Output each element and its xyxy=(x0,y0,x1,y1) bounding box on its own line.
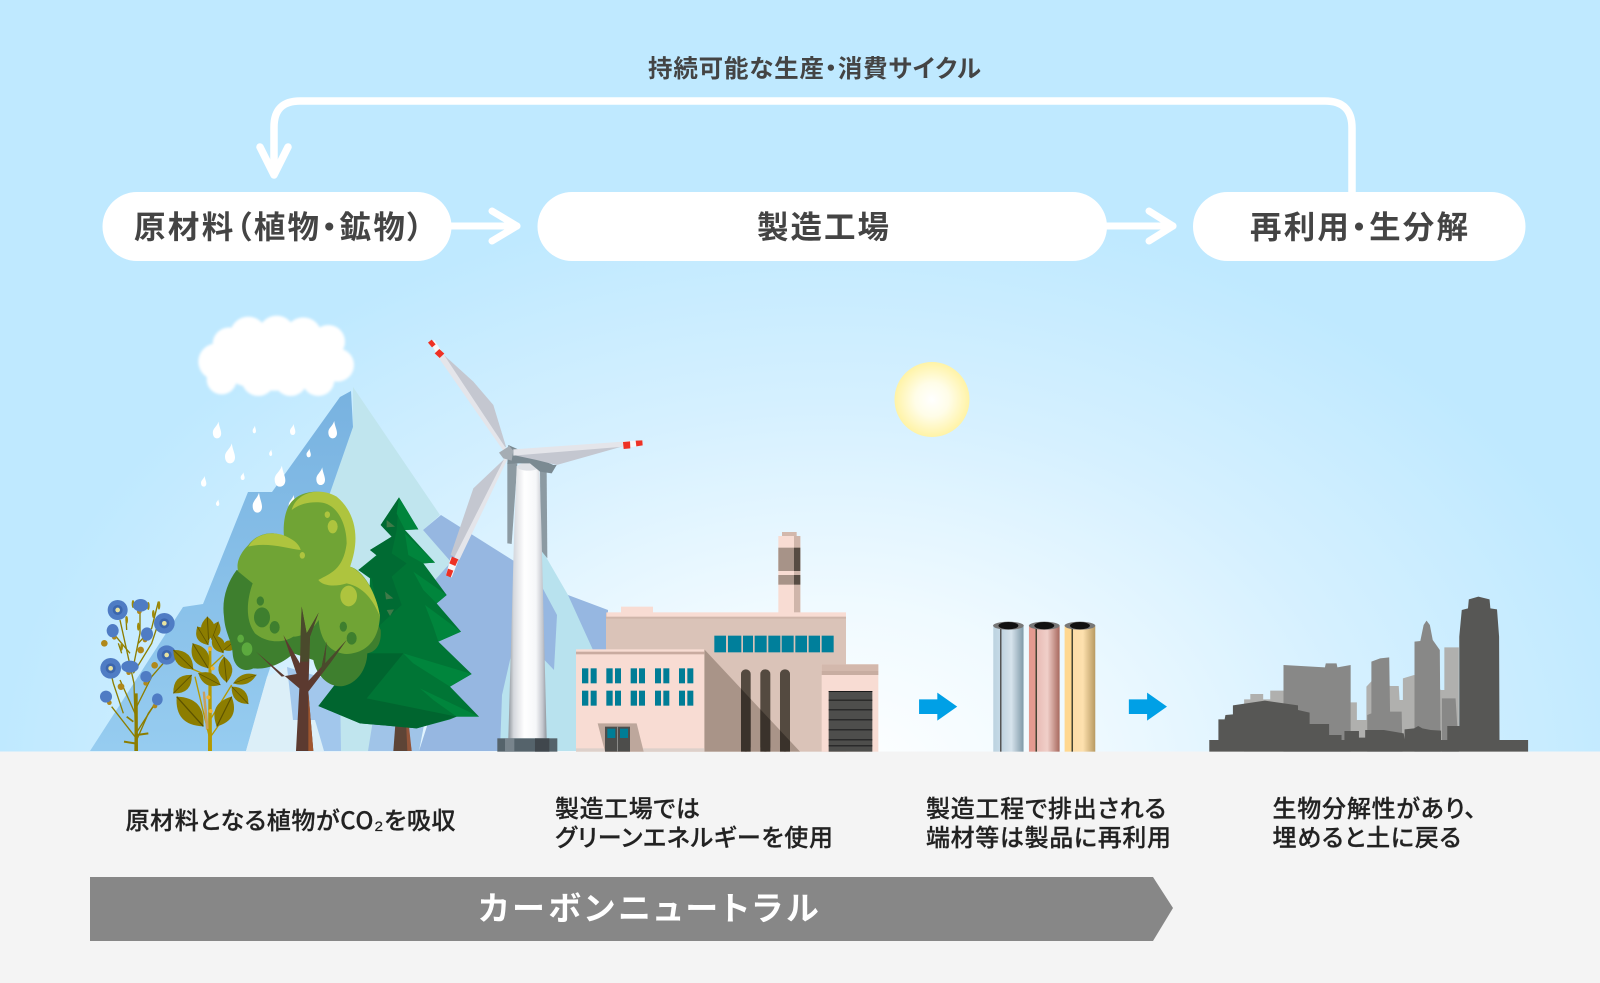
film rolls xyxy=(993,622,1095,752)
arrow: film rolls to city xyxy=(1129,693,1167,721)
raindrops xyxy=(201,421,337,513)
sun xyxy=(894,362,970,437)
ground band xyxy=(0,752,1600,983)
arrow: recycling return loop xyxy=(260,101,1352,192)
caption: factory: グリーンエネルギーを使用 xyxy=(555,825,833,852)
mountains xyxy=(90,387,608,751)
flow pill: factory xyxy=(538,192,1107,261)
leafy plant xyxy=(168,616,258,751)
main building xyxy=(606,607,846,752)
caption: offcuts reuse: 端材等は製品に再利用 xyxy=(926,825,1171,852)
factory xyxy=(576,532,878,752)
carbon neutral band arrow: カーボンニュートラル xyxy=(478,890,818,927)
flow pill: raw materials: 原材料（植物・鉱物） xyxy=(134,209,423,245)
flax plant with blue flowers xyxy=(100,599,176,751)
carbon neutral band arrow xyxy=(90,877,1173,941)
caption: biodegradable: 埋めると土に戻る xyxy=(1272,825,1461,852)
caption: biodegradable xyxy=(1272,796,1476,852)
broadleaf tree xyxy=(223,492,381,751)
arrow: raw materials to factory xyxy=(451,211,517,241)
flow pill: reuse and biodegradation: 再利用・生分解 xyxy=(1250,209,1468,245)
annex with shutter xyxy=(822,664,878,752)
front building xyxy=(576,649,704,752)
caption: offcuts reuse xyxy=(926,796,1171,852)
pine tree xyxy=(318,497,479,751)
caption: biodegradable: 生物分解性があり、 xyxy=(1272,796,1476,823)
flow pill: reuse and biodegradation xyxy=(1193,192,1526,261)
caption: raw materials: 原材料となる植物がCO₂を吸収 xyxy=(126,801,456,836)
flow pill: raw materials xyxy=(102,192,452,261)
caption: factory xyxy=(555,796,833,852)
caption: factory: 製造工場では xyxy=(555,796,700,823)
cycle heading: 持続可能な生産・消費サイクル xyxy=(648,55,981,83)
chimney xyxy=(778,532,800,613)
caption: offcuts reuse: 製造工程で排出される xyxy=(926,796,1166,823)
arrow: factory to recycling xyxy=(1107,211,1173,241)
cloud xyxy=(198,316,354,396)
flow pill: factory: 製造工場 xyxy=(757,209,889,245)
cloud with rain xyxy=(198,316,354,513)
arrow: factory to film rolls xyxy=(919,693,957,721)
wind turbine xyxy=(428,340,643,752)
city skyline xyxy=(1209,597,1528,752)
